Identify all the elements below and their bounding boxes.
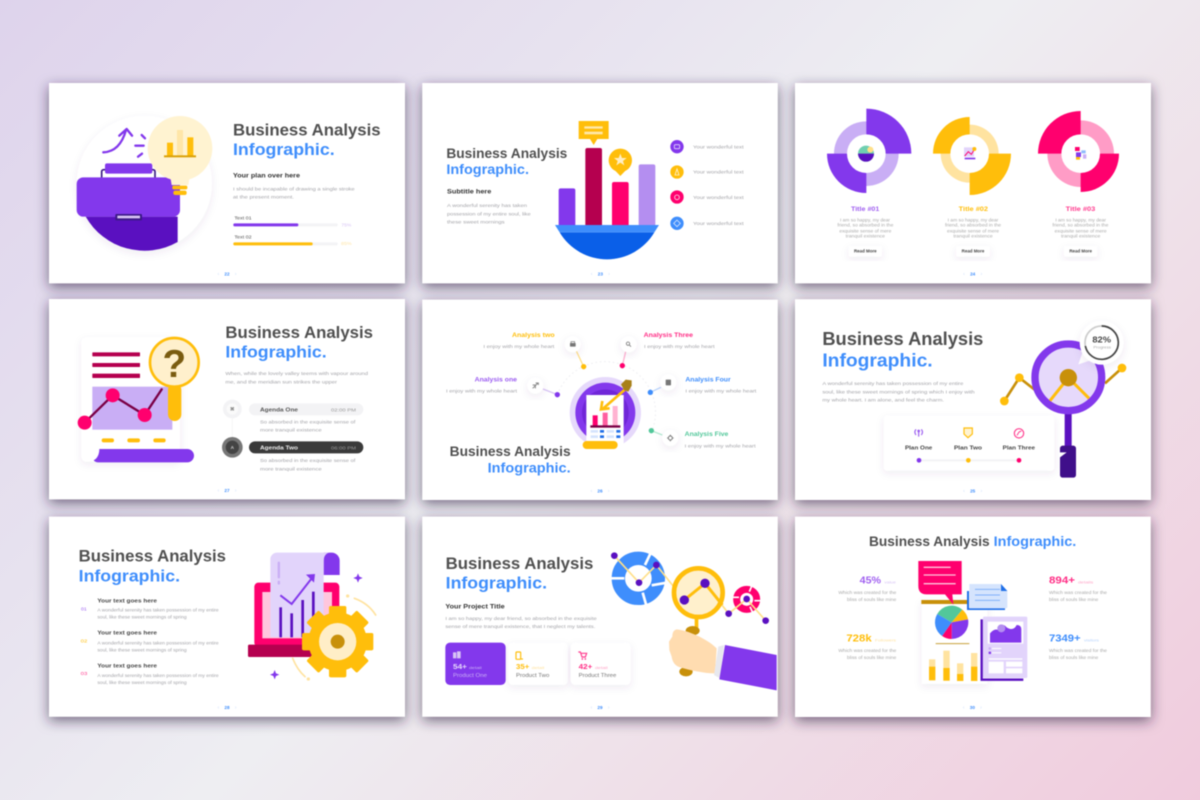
central illustration: target report	[570, 377, 641, 449]
heading: Infographic.	[446, 162, 529, 177]
page number	[963, 488, 982, 494]
list item 01	[81, 598, 219, 621]
body text	[233, 186, 355, 200]
node: analysis two: Analysis two	[512, 332, 555, 339]
body text: these sweet mornings	[447, 220, 505, 226]
column text: title 03: tranquil existence	[1061, 234, 1101, 239]
plan card: Plan One	[905, 445, 932, 451]
body text: I should be incapable of drawing a single stroke	[233, 186, 355, 192]
page number	[590, 489, 610, 495]
panel: slide 29 project products	[422, 517, 778, 717]
column text: title 03: exquisite sense of mere	[1055, 228, 1107, 233]
panel: slide 23 bar chart	[422, 83, 778, 283]
heading: Infographic.	[225, 343, 327, 362]
card: product one: Product One	[453, 673, 487, 679]
progress bars: 85%	[341, 241, 352, 247]
heading	[822, 328, 983, 370]
body text	[822, 381, 975, 403]
node: analysis four	[648, 374, 757, 395]
plan card	[884, 416, 1054, 471]
panel: slide 30 stats	[795, 517, 1151, 717]
page number: 25	[970, 488, 976, 493]
page number: ‹	[590, 705, 592, 711]
column text: title 02: Title #02	[959, 206, 989, 213]
page number: ›	[235, 272, 237, 278]
page number	[963, 705, 982, 711]
agenda two: So absorbed in the exquisite sense of	[260, 458, 356, 464]
card: product one: 54+	[453, 662, 467, 671]
body text: A wonderful serenity has taken	[447, 203, 527, 209]
agenda one: 02:00 PM	[331, 407, 356, 413]
page number: ›	[235, 705, 237, 711]
card: product two: 35+	[516, 662, 529, 671]
legend list: Your wonderful text	[693, 195, 744, 201]
plan card: Plan Two	[954, 445, 983, 451]
node: analysis five	[649, 428, 756, 449]
column text: title 03: I am so happy, my dear	[1055, 217, 1107, 222]
page number: 27	[224, 488, 230, 493]
list item 03: soul, like these sweet mornings of spring	[97, 680, 187, 686]
column text: title 01: Title #01	[851, 206, 880, 213]
column text: title 03: Title #03	[1066, 206, 1096, 213]
list item 03: 03	[81, 671, 88, 677]
page number: ›	[608, 272, 610, 278]
node: analysis one: Analysis one	[475, 376, 518, 383]
node: analysis three: Analysis Three	[644, 332, 694, 339]
donut: pink	[1038, 111, 1119, 192]
slide background	[795, 517, 1151, 717]
progress bars: Text 02	[234, 235, 252, 241]
column text: title 03: friend, so absorbed in the	[1052, 223, 1109, 228]
heading: Business Analysis	[225, 323, 373, 342]
legend list: Your wonderful text	[693, 144, 744, 150]
illustration: hand with magnifier	[669, 568, 777, 690]
column text: title 02: friend, so absorbed in the	[945, 223, 1002, 228]
body text: A wonderful serenity has taken possession of my entire	[822, 381, 964, 387]
page number	[590, 705, 610, 711]
page number: ›	[608, 489, 610, 495]
stat 7349+: bliss of souls like mine	[1049, 655, 1099, 660]
node: analysis three: I enjoy with my whole heart	[644, 344, 715, 350]
body text	[225, 371, 368, 385]
stat 45%: value	[884, 579, 897, 584]
page number: ‹	[217, 272, 219, 278]
body text: When, while the lovely valley teems with vapour around	[225, 371, 368, 377]
agenda one: So absorbed in the exquisite sense of	[260, 419, 356, 425]
page number: 30	[970, 705, 975, 710]
donut: purple	[827, 109, 911, 193]
panel: slide 25 magnifier progress	[795, 299, 1151, 500]
stat 728k: bliss of souls like mine	[847, 655, 897, 660]
dashed arc	[557, 362, 656, 430]
node: analysis one	[446, 376, 560, 397]
agenda two: 06:00 PM	[331, 445, 356, 451]
stat 894+: bliss of souls like mine	[1049, 597, 1099, 602]
heading: Business Analysis	[79, 547, 226, 566]
list item 03: A wonderful serenity has taken possession of my entire	[97, 673, 219, 679]
list item 01: Your text goes here	[97, 598, 157, 604]
heading: Infographic.	[79, 566, 180, 585]
panel: slide 26 radial analysis	[422, 300, 778, 500]
slide background	[49, 299, 405, 499]
heading: Business Analysis	[233, 120, 381, 139]
heading: Business Analysis	[869, 534, 990, 549]
page number: 26	[597, 489, 603, 494]
card: product two	[508, 643, 568, 685]
agenda one: Agenda One	[260, 407, 298, 413]
page number: ‹	[590, 489, 592, 495]
page number: 24	[970, 272, 976, 277]
agenda two	[222, 437, 363, 472]
page number: 28	[224, 705, 230, 710]
card: product two: Product Two	[516, 673, 549, 679]
slide background	[422, 300, 778, 500]
page number: ›	[608, 705, 610, 711]
column text: title 01	[837, 206, 894, 239]
speech bubble	[918, 561, 962, 605]
agenda two: A	[231, 445, 235, 450]
subheading: Your plan over here	[233, 173, 300, 180]
list item 03	[81, 663, 219, 686]
card: product one	[445, 643, 506, 685]
body text	[447, 203, 531, 226]
column text: title 01: exquisite sense of mere	[839, 228, 892, 233]
agenda one: more tranquil existence	[260, 428, 322, 434]
list item 02: soul, like these sweet mornings of spring	[97, 647, 187, 653]
column text: title 01: tranquil existence	[846, 234, 886, 239]
stat 45%: Which was created for the	[838, 590, 897, 595]
lavender report	[982, 617, 1027, 680]
stat 45%: bliss of souls like mine	[847, 597, 897, 602]
page number: ‹	[963, 705, 965, 711]
slide background	[795, 299, 1151, 500]
illustration: laptop report and gear	[248, 553, 376, 681]
heading: Infographic.	[233, 140, 335, 159]
node: analysis one: I enjoy with my whole heart	[446, 389, 518, 395]
card: product three: 42+	[579, 662, 592, 671]
panel: slide 28 gear laptop	[49, 517, 405, 717]
icon: speech bubble	[579, 121, 609, 145]
stat 894+: details	[1078, 579, 1093, 584]
buttons: Read More	[854, 249, 877, 254]
body text: at the present moment.	[233, 194, 294, 200]
heading: Infographic.	[822, 349, 933, 370]
slide background	[49, 517, 405, 717]
page number: ›	[980, 705, 982, 711]
body text: my whole heart. I am alone, and feel the charm.	[822, 397, 944, 403]
progress bars: Text 01	[234, 215, 252, 221]
heading: Business Analysis	[446, 554, 593, 573]
progress bars: 75%	[341, 223, 352, 229]
agenda two: Agenda Two	[260, 445, 299, 451]
page number: ‹	[963, 488, 965, 494]
node: analysis five: Analysis Five	[685, 431, 729, 438]
legend list	[670, 140, 744, 230]
illustration: document with magnifier: ?	[163, 343, 186, 386]
list item 02: 02	[81, 639, 88, 645]
heading: Infographic.	[488, 460, 571, 475]
slide background	[422, 83, 778, 283]
slide background	[422, 517, 778, 717]
card: product three: Product Three	[579, 673, 616, 679]
list item 02: Your text goes here	[97, 631, 157, 637]
page number	[217, 488, 237, 494]
progress bars	[233, 215, 352, 247]
panel: slide 22 briefcase	[49, 83, 405, 283]
column text: title 02: exquisite sense of mere	[947, 228, 1000, 233]
stat 728k: Followers	[875, 637, 896, 642]
body text	[445, 616, 597, 630]
stat 894+: Which was created for the	[1049, 590, 1107, 595]
plan card: Plan Three	[1003, 445, 1035, 451]
agenda one: ⌘	[230, 407, 235, 412]
list item 03: Your text goes here	[97, 663, 157, 669]
card: product two: detail	[532, 665, 544, 670]
page number	[217, 705, 237, 711]
stat 728k: 728k	[846, 633, 872, 644]
page number: ‹	[217, 488, 219, 494]
buttons: Read More	[1069, 249, 1093, 254]
body text: me, and the meridian sun strikes the upper	[225, 379, 337, 385]
heading	[446, 146, 568, 177]
heading	[450, 444, 571, 475]
node: analysis four: Analysis Four	[685, 376, 731, 383]
stat 728k: Which was created for the	[838, 648, 897, 653]
page number	[217, 272, 237, 278]
icon: sparkles	[270, 573, 363, 679]
page number: ›	[980, 488, 982, 494]
body text: soul, like these sweet mornings of spring which I enjoy with	[822, 389, 975, 395]
stat 7349+: 7349+	[1049, 633, 1081, 644]
icon: briefcase and light bulb	[77, 116, 212, 251]
node: analysis four: I enjoy with my whole heart	[685, 389, 757, 395]
node: analysis two: I enjoy with my whole heart	[483, 344, 555, 350]
page number: 29	[597, 705, 603, 710]
donut: blue	[610, 552, 667, 607]
stat 7349+: Which was created for the	[1049, 648, 1107, 653]
list item 01: 01	[81, 606, 87, 612]
heading	[225, 323, 373, 362]
stat 894+: 894+	[1049, 575, 1075, 586]
slide background	[49, 83, 405, 283]
legend list: Your wonderful text	[693, 221, 744, 227]
page number: ‹	[591, 272, 593, 278]
panel: slide 24 three donuts	[795, 83, 1151, 283]
progress badge 82%: 82%	[1092, 335, 1111, 344]
node: analysis five: I enjoy with my whole heart	[685, 443, 756, 449]
card: product one: detail	[469, 665, 482, 670]
illustration: document with magnifier	[78, 337, 199, 462]
agenda two: more tranquil existence	[260, 466, 322, 472]
list item 01: A wonderful serenity has taken possession of my entire	[97, 608, 219, 614]
page number: ›	[980, 272, 982, 278]
list item 02: A wonderful serenity has taken possession of my entire	[97, 640, 219, 646]
body text: possession of my entire soul, like	[447, 211, 531, 217]
heading	[79, 547, 226, 585]
page number: 23	[598, 272, 603, 277]
illustration: magnifier over line chart	[1000, 344, 1126, 478]
body text: I am so happy, my dear friend, so absorbed in the exquisite	[445, 616, 597, 622]
column text: title 02: I am so happy, my dear	[948, 217, 999, 222]
buttons	[849, 246, 1097, 257]
donut: pink	[732, 585, 762, 614]
page number: ‹	[217, 705, 219, 711]
progress badge 82%: Progress	[1093, 346, 1111, 350]
node: analysis three	[620, 332, 715, 368]
agenda one	[223, 400, 363, 437]
stat 894+	[1049, 575, 1107, 602]
progress badge 82%	[1078, 321, 1124, 365]
subheading: Subtitle here	[447, 189, 492, 196]
legend list: Your wonderful text	[693, 170, 744, 176]
stat 7349+	[1049, 633, 1107, 660]
list item 01: soul, like these sweet mornings of spring	[97, 615, 187, 621]
panel: slide 27 agenda	[49, 299, 405, 499]
stat 45%	[838, 575, 897, 602]
page number	[963, 272, 982, 278]
stat 45%: 45%	[860, 575, 881, 586]
stat 728k	[838, 633, 897, 660]
stat 7349+: visitors	[1084, 637, 1099, 642]
heading	[446, 554, 593, 593]
heading	[869, 534, 1076, 549]
page number: ›	[235, 488, 237, 494]
column text: title 03	[1052, 206, 1109, 239]
heading: Business Analysis	[822, 328, 983, 349]
heading: Infographic.	[994, 534, 1076, 549]
line chart with dots	[611, 552, 769, 624]
column text: title 01: friend, so absorbed in the	[837, 223, 894, 228]
card: product three: detail	[595, 665, 608, 670]
buttons: Read More	[962, 249, 985, 254]
list item 02	[81, 631, 219, 653]
subheading: Your Project Title	[445, 604, 505, 610]
heading: Business Analysis	[450, 444, 571, 459]
body text: sense of mere tranquil existence, that I neglect my talents.	[445, 624, 595, 630]
slide background	[795, 83, 1151, 283]
blue note	[968, 584, 1007, 609]
page number: ‹	[963, 272, 965, 278]
column text: title 02	[945, 206, 1002, 239]
page number	[591, 272, 610, 278]
page number: 22	[224, 272, 230, 277]
icon: star pin	[609, 149, 632, 176]
heading: Business Analysis	[446, 146, 568, 161]
column text: title 01: I am so happy, my dear	[840, 217, 891, 222]
column text: title 02: tranquil existence	[953, 234, 993, 239]
card: product three	[571, 643, 631, 685]
illustration: report with pie and bars	[921, 600, 987, 684]
heading	[233, 120, 381, 159]
bar chart in bowl	[555, 148, 659, 259]
node: analysis two	[483, 332, 586, 369]
heading: Infographic.	[446, 574, 547, 593]
donut: yellow	[933, 117, 1011, 195]
